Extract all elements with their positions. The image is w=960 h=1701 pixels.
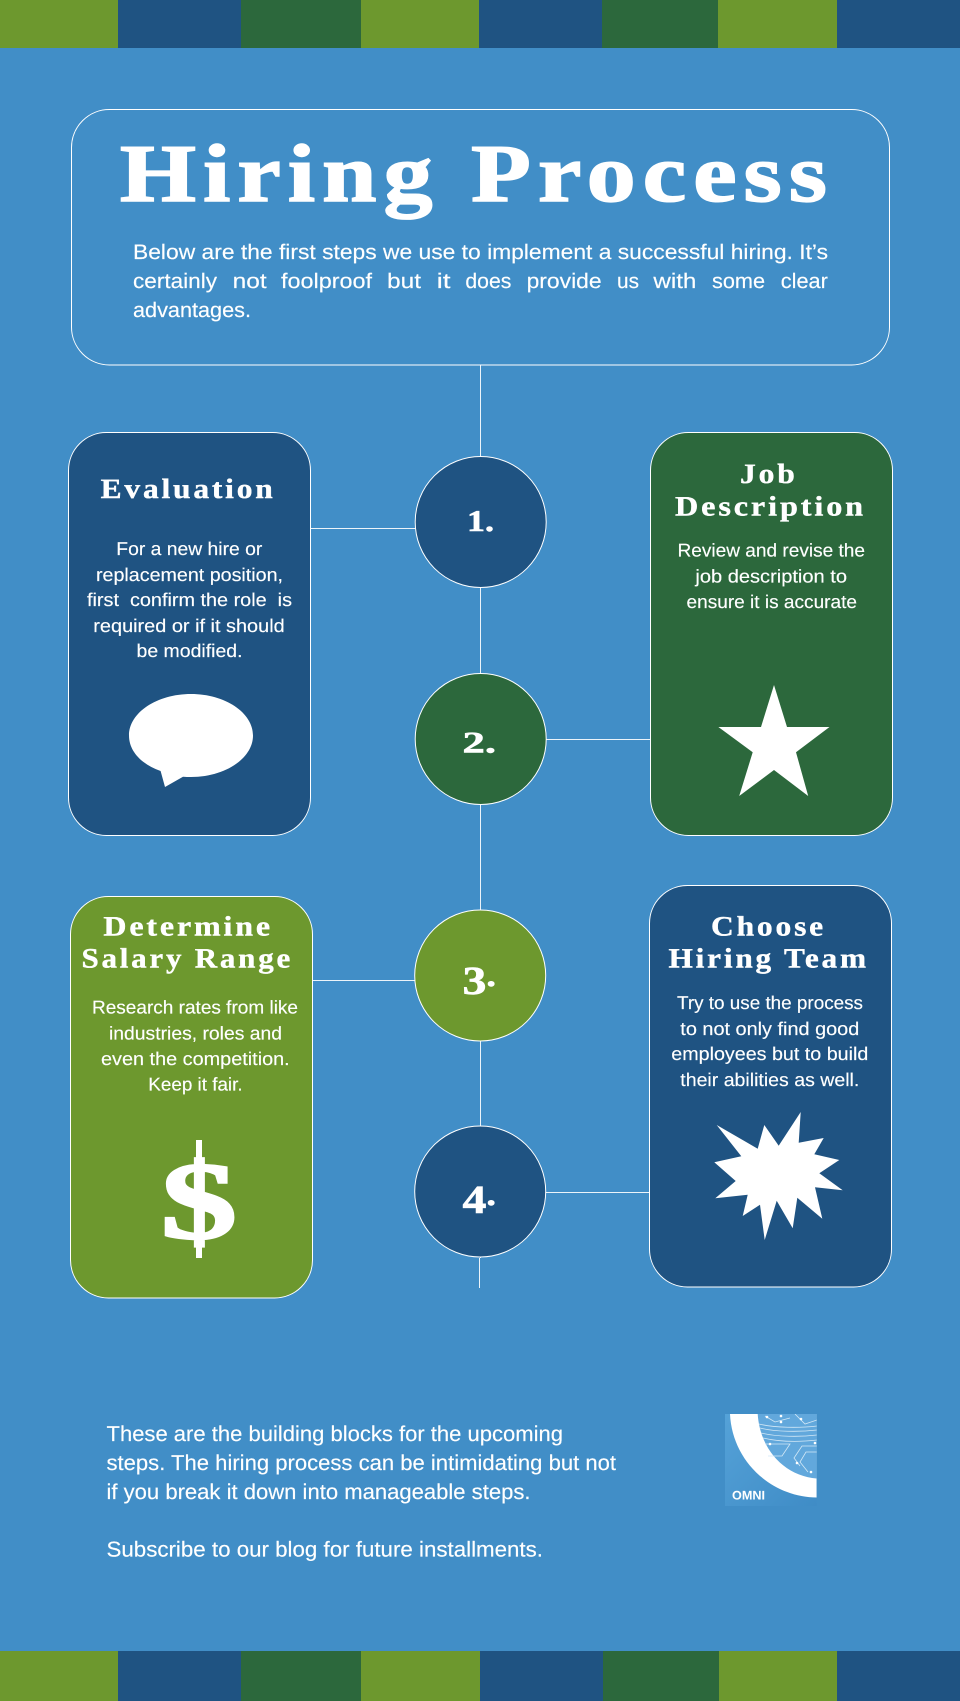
panel: determine salary range bbox=[70, 896, 312, 1298]
evaluation text bbox=[87, 538, 292, 661]
salary text: even the competition. bbox=[101, 1048, 290, 1069]
step 1 circle bbox=[415, 456, 546, 588]
icon: starburst bbox=[714, 1112, 843, 1240]
logo: omni bbox=[725, 1414, 817, 1506]
evaluation text: replacement position, bbox=[96, 564, 283, 585]
heading: hiring team: Choose bbox=[711, 912, 826, 943]
bottom colour band bbox=[0, 1651, 960, 1701]
closing text: steps. The hiring process can be intimidating but not bbox=[106, 1451, 616, 1475]
intro text: not bbox=[233, 270, 267, 293]
intro text: does bbox=[465, 270, 511, 293]
intro text: us bbox=[617, 270, 639, 293]
heading: hiring team: Hiring Team bbox=[668, 943, 869, 974]
salary text: Keep it fair. bbox=[148, 1074, 243, 1095]
intro text: foolproof bbox=[281, 270, 372, 293]
heading: salary range bbox=[82, 912, 293, 974]
hiring team text: their abilities as well. bbox=[680, 1069, 859, 1090]
intro text: but bbox=[387, 270, 421, 293]
step 4 circle: 4 bbox=[462, 1177, 482, 1222]
step 3 circle bbox=[415, 910, 546, 1041]
intro text: it bbox=[437, 270, 451, 293]
icon: star bbox=[718, 685, 830, 796]
heading: salary range: Determine bbox=[103, 912, 273, 943]
heading: evaluation: Evaluation bbox=[101, 474, 276, 505]
intro text: Below are the first steps we use to implement a successful hiring. It’s bbox=[133, 241, 828, 264]
panel: evaluation bbox=[68, 432, 310, 836]
title: Hiring Process bbox=[120, 128, 834, 220]
panel: header bbox=[72, 110, 890, 365]
icon: dollar sign: $ bbox=[161, 1140, 237, 1262]
step 2 circle bbox=[415, 674, 546, 804]
heading: job description: Description bbox=[675, 492, 866, 523]
hiring team text: to not only find good bbox=[680, 1018, 859, 1039]
evaluation text: first confirm the role is bbox=[87, 589, 292, 610]
hiring team text: Try to use the process bbox=[677, 992, 863, 1013]
hiring team text: employees but to build bbox=[671, 1043, 868, 1064]
intro text: provide bbox=[527, 270, 602, 293]
evaluation text: required or if it should bbox=[93, 615, 285, 636]
step 4 circle: . bbox=[486, 1176, 496, 1212]
step 3 circle: . bbox=[486, 957, 496, 993]
heading: job description: Job bbox=[740, 459, 798, 490]
icon: speech bubble bbox=[129, 694, 253, 787]
intro text: clear bbox=[781, 270, 828, 293]
closing text: Subscribe to our blog for future installments. bbox=[106, 1538, 543, 1562]
step 3 circle: 3 bbox=[462, 958, 482, 1003]
evaluation text: be modified. bbox=[136, 640, 242, 661]
intro text bbox=[133, 241, 828, 322]
heading: hiring team bbox=[668, 912, 869, 974]
panel: job description bbox=[650, 432, 892, 836]
timeline connector lines bbox=[310, 365, 651, 1288]
panel: choose hiring team bbox=[650, 886, 892, 1287]
intro text: with bbox=[652, 270, 696, 293]
salary text bbox=[92, 997, 298, 1095]
job description text: job description to bbox=[694, 566, 847, 587]
step 4 circle bbox=[415, 1126, 546, 1257]
salary text: industries, roles and bbox=[109, 1023, 282, 1044]
top colour band bbox=[0, 0, 960, 48]
heading: salary range: Salary Range bbox=[82, 943, 293, 974]
job description text: ensure it is accurate bbox=[686, 591, 857, 612]
closing text bbox=[106, 1422, 616, 1562]
step 1 circle: 1. bbox=[467, 505, 494, 538]
intro text: certainly bbox=[133, 270, 218, 293]
job description text bbox=[678, 540, 865, 612]
evaluation text: For a new hire or bbox=[116, 538, 262, 559]
hiring team text bbox=[671, 992, 868, 1090]
job description text: Review and revise the bbox=[678, 540, 865, 561]
intro text: advantages. bbox=[133, 299, 251, 322]
closing text: if you break it down into manageable steps. bbox=[106, 1480, 530, 1504]
logo: omni: OMNI bbox=[732, 1488, 765, 1502]
intro text: some bbox=[712, 270, 765, 293]
closing text: These are the building blocks for the upcoming bbox=[106, 1422, 563, 1446]
step 2 circle: 2. bbox=[462, 727, 496, 760]
heading: job description bbox=[675, 459, 866, 523]
salary text: Research rates from like bbox=[92, 997, 298, 1018]
